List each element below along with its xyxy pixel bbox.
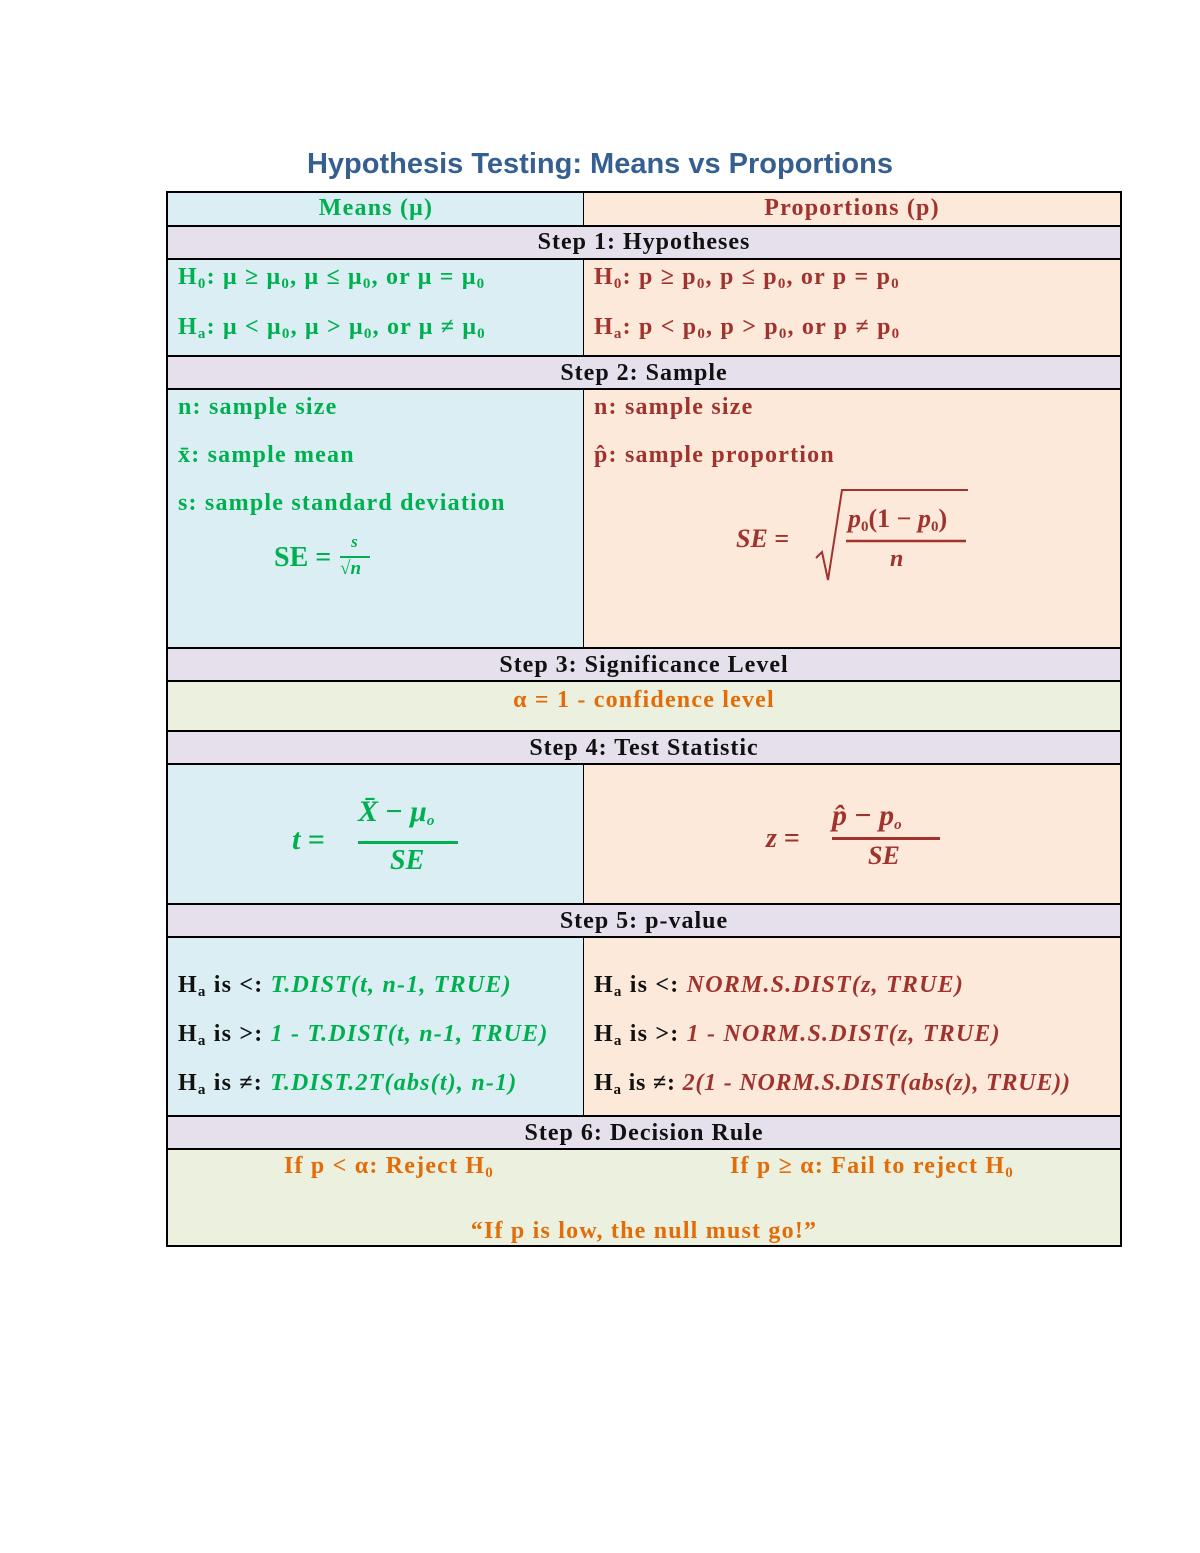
table: n (890, 546, 905, 572)
table: Ha is ≠: 2(1 - NORM.S.DIST(abs(z), TRUE)) (594, 1070, 1071, 1098)
step 5 content (168, 938, 584, 1116)
step 4 content: t = (292, 823, 325, 856)
table: Ha: p < p0, p > p0, or p ≠ p0 (594, 314, 900, 342)
table: Ha is >: 1 - NORM.S.DIST(z, TRUE) (594, 1021, 1001, 1049)
step 5 content: Ha is <: T.DIST(t, n-1, TRUE) (178, 972, 512, 1000)
table: p0(1 − p0) (848, 504, 947, 535)
step 4 content (168, 765, 584, 904)
step 3 header: Step 3: Significance Level (499, 652, 789, 678)
step 2 header: Step 2: Sample (560, 360, 728, 386)
table: n: sample size (594, 394, 753, 420)
step 2 content: n: sample size (178, 394, 337, 420)
step 5 header (168, 905, 1120, 937)
step 1 content (168, 260, 584, 356)
table: p̂ − po (832, 799, 902, 833)
step 2 content: s: sample standard deviation (178, 490, 506, 516)
table: Ha is <: NORM.S.DIST(z, TRUE) (594, 972, 964, 1000)
step 6 header: Step 6: Decision Rule (524, 1120, 764, 1146)
step 6 content: If p < α: Reject H0 (284, 1153, 494, 1181)
step 6 content (168, 1150, 1120, 1245)
step 3 content: α = 1 - confidence level (513, 687, 775, 713)
table (166, 191, 1122, 1247)
step 2 content: x̄: sample mean (178, 442, 355, 468)
step 2 content (168, 390, 584, 648)
step 3 content (168, 682, 1120, 731)
step 2 header (168, 357, 1120, 389)
step 6 content: “If p is low, the null must go!” (471, 1218, 817, 1244)
step 5 header: Step 5: p-value (560, 908, 728, 934)
table: SE = (736, 524, 789, 553)
step 4 content: SE (390, 845, 424, 876)
step 4 header: Step 4: Test Statistic (529, 735, 759, 761)
step 1 header: Step 1: Hypotheses (538, 229, 750, 255)
table: H0: p ≥ p0, p ≤ p0, or p = p0 (594, 264, 900, 292)
table: Proportions (p) (764, 195, 940, 221)
table: SE (868, 841, 900, 870)
title: Hypothesis Testing: Means vs Proportions (307, 148, 893, 180)
table: p̂: sample proportion (594, 442, 835, 468)
step 2 content: √n (340, 558, 361, 579)
step 5 content: Ha is ≠: T.DIST.2T(abs(t), n-1) (178, 1070, 517, 1098)
step 6 header (168, 1117, 1120, 1149)
step 5 content: Ha is >: 1 - T.DIST(t, n-1, TRUE) (178, 1021, 549, 1049)
step 2 content: s (351, 532, 359, 551)
column headers (168, 193, 584, 225)
grid lines (168, 225, 1120, 227)
step 4 header (168, 732, 1120, 764)
step 1 header (168, 226, 1120, 259)
table: z = (766, 823, 800, 854)
step 4 content: X̄ − μo (358, 795, 434, 829)
step 1 content: H0: μ ≥ μ0, μ ≤ μ0, or μ = μ0 (178, 264, 485, 292)
table: Means (μ) (319, 195, 433, 221)
step 6 content: If p ≥ α: Fail to reject H0 (730, 1153, 1014, 1181)
step 1 content: Ha: μ < μ0, μ > μ0, or μ ≠ μ0 (178, 314, 486, 342)
step 2 content: SE = (274, 542, 331, 573)
step 3 header (168, 649, 1120, 681)
